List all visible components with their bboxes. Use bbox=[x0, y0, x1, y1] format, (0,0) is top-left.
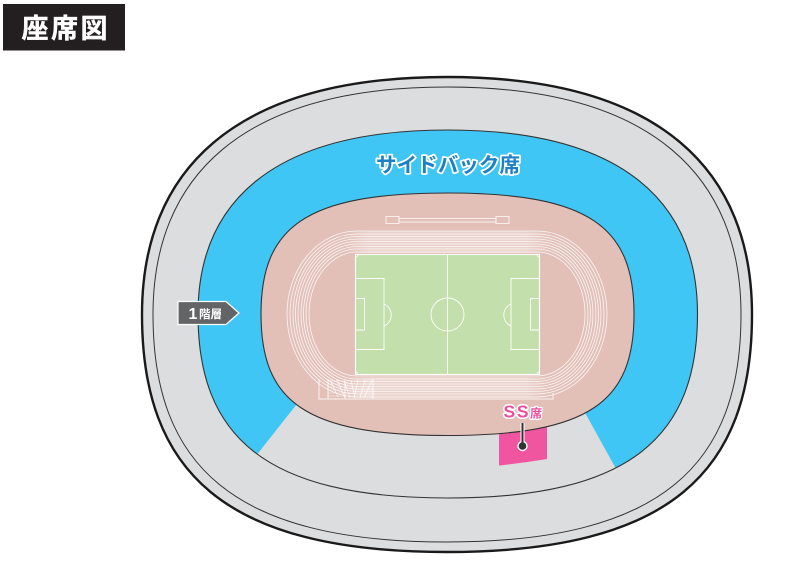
title bbox=[3, 4, 125, 50]
label: SS seats with pin: 席 bbox=[530, 406, 542, 420]
floor marker: first floor: 1 bbox=[188, 306, 198, 323]
label: SS seats with pin: SS bbox=[504, 402, 528, 422]
sprint start area bbox=[319, 379, 553, 399]
football pitch bbox=[356, 254, 540, 374]
infield bbox=[261, 193, 634, 436]
running track bbox=[287, 231, 607, 398]
floor marker: first floor: 階層 bbox=[199, 308, 222, 321]
SS seat block bbox=[499, 420, 547, 466]
stadium outer shell bbox=[142, 77, 752, 552]
label: SS seats with pin bbox=[504, 402, 542, 451]
floor marker: first floor bbox=[178, 302, 239, 324]
label: side and back seats: サイドバック席 bbox=[376, 154, 520, 177]
title: 座席図 bbox=[22, 14, 110, 44]
seating bowl: side and back seats bbox=[198, 130, 698, 498]
throwing runway bbox=[386, 216, 509, 224]
